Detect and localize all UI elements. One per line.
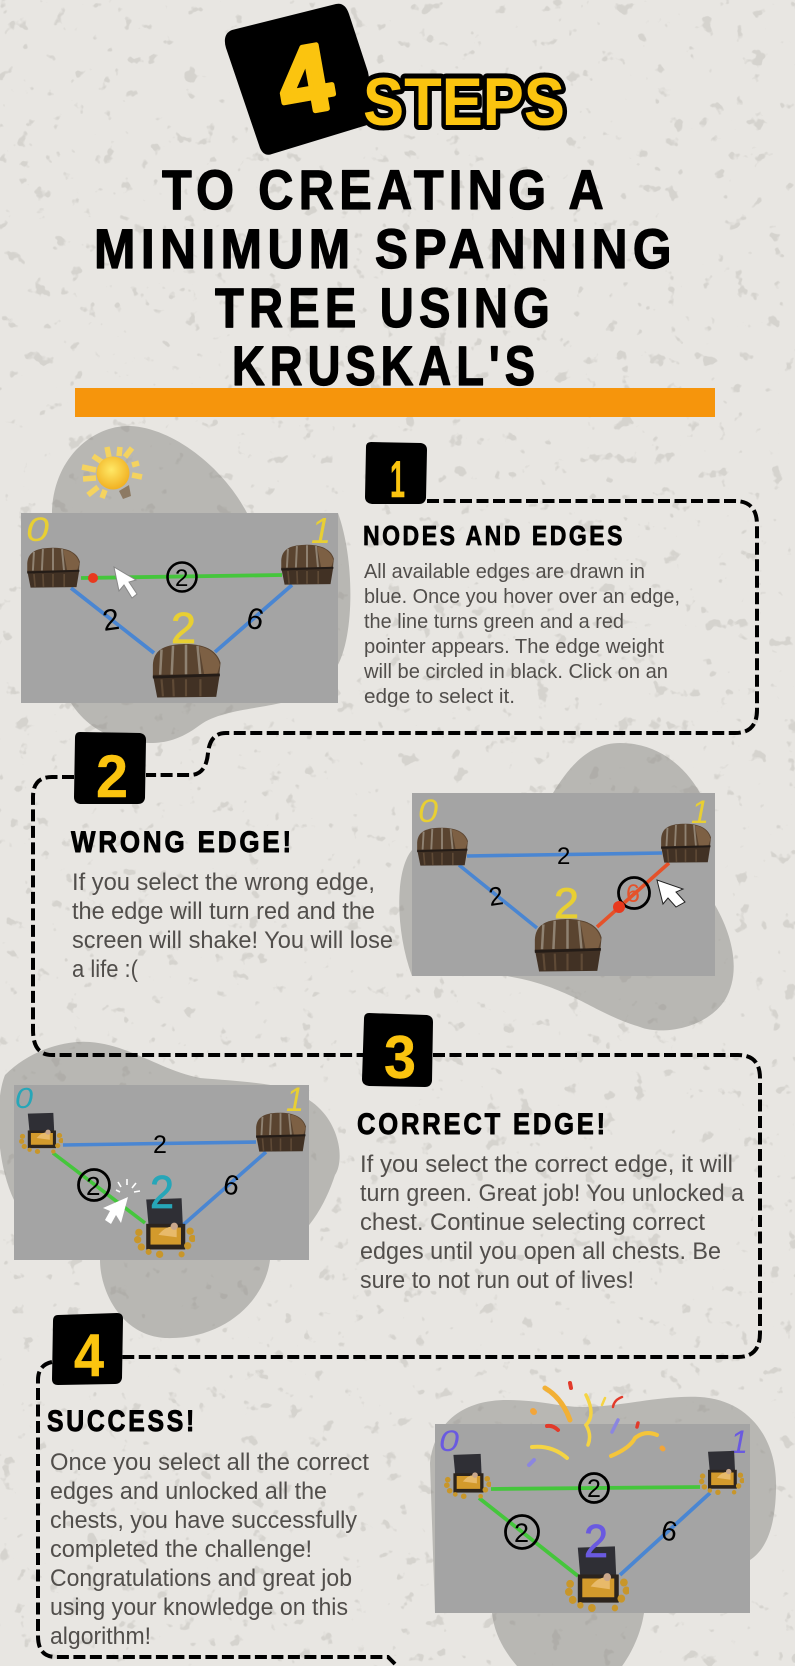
- step 2 body text: screen will shake! You will lose: [72, 927, 393, 954]
- chests: [444, 1451, 745, 1612]
- edge weights: 2: [175, 565, 188, 592]
- edge weights: 6: [221, 1168, 242, 1202]
- edge weights: [487, 843, 650, 912]
- step 3 badge: [362, 1013, 433, 1091]
- node labels: 0: [418, 793, 438, 829]
- step 2 badge: [74, 732, 146, 810]
- step 2 body text: If you select the wrong edge,: [72, 869, 375, 896]
- edge weights: 6: [244, 602, 267, 637]
- edge weights: 2: [587, 1475, 601, 1503]
- title text: MINIMUM SPANNING: [94, 217, 677, 280]
- step 4 body text: edges and unlocked all the: [50, 1478, 327, 1505]
- step 4 body text: Once you select all the correct: [50, 1449, 369, 1476]
- node labels: [418, 793, 709, 928]
- blob: step 4 background: [430, 1397, 776, 1666]
- node labels: 1: [286, 1081, 304, 1119]
- node labels: 0: [15, 1083, 33, 1115]
- edge weights: [506, 1474, 680, 1548]
- title badge: big 4 on black square: [225, 4, 377, 155]
- icon: confetti: [529, 1383, 663, 1465]
- edge weights: 2: [153, 1131, 167, 1159]
- step 3 body text: edges until you open all chests. Be: [360, 1238, 721, 1265]
- step 3 body text: [360, 1151, 745, 1294]
- node labels: 2: [554, 880, 579, 928]
- step 3 body text: turn green. Great job! You unlocked a: [360, 1180, 745, 1207]
- title badge: big 4 on black square: 4: [270, 23, 340, 136]
- dashed path connecting steps: [33, 501, 760, 1664]
- icon: light bulb: [82, 447, 142, 499]
- step 4 body text: [50, 1449, 369, 1650]
- edges: [53, 1142, 266, 1225]
- mouse cursor: [657, 880, 685, 907]
- step 2 badge: 2: [96, 743, 128, 810]
- step 1 body text: will be circled in black. Click on an: [363, 660, 668, 683]
- blob: step 3 background: [0, 1042, 340, 1338]
- step 1 body text: [363, 560, 680, 708]
- game screenshot 4: [435, 1424, 750, 1613]
- step 4 body text: Congratulations and great job: [50, 1565, 352, 1592]
- step 4 body text: chests, you have successfully: [50, 1507, 357, 1534]
- step 1 body text: pointer appears. The edge weight: [364, 635, 664, 658]
- step 4 body text: completed the challenge!: [50, 1536, 312, 1563]
- title text: KRUSKAL'S: [232, 334, 540, 397]
- step 2 body text: [72, 869, 393, 983]
- step 3 badge: 3: [384, 1024, 416, 1091]
- step 1 badge: 1: [390, 451, 405, 509]
- step 4 badge: 4: [74, 1322, 105, 1389]
- edges: [71, 575, 292, 653]
- step 2 heading: WRONG EDGE!: [71, 826, 294, 859]
- orange divider bar: [75, 388, 715, 417]
- title text: [94, 158, 677, 397]
- title text: TO CREATING A: [162, 158, 609, 221]
- click cursor: [103, 1179, 140, 1224]
- step 1 badge: [365, 442, 427, 509]
- game screenshot 1: [21, 510, 338, 703]
- edge weights: 2: [86, 1171, 100, 1201]
- edge weights: 2: [487, 880, 505, 912]
- game screenshot 3: [14, 1081, 309, 1260]
- node labels: 0: [26, 511, 49, 549]
- panel: step 2 wrong edge: [71, 732, 715, 983]
- node label 2: 2: [584, 1515, 608, 1567]
- step 1 body text: edge to select it.: [364, 685, 515, 708]
- panel: step 3 correct edge: [14, 1013, 745, 1294]
- step 4 badge: [52, 1313, 123, 1389]
- node label 2: 2: [150, 1166, 174, 1218]
- edges: [479, 1487, 710, 1576]
- node labels: [26, 510, 331, 653]
- edge weights: 2: [557, 843, 570, 870]
- edges: [459, 853, 669, 928]
- step 3 heading: CORRECT EDGE!: [357, 1108, 608, 1141]
- panel: step 1 nodes and edges: [21, 442, 680, 708]
- edge weights: [78, 1131, 242, 1202]
- step 4 body text: using your knowledge on this: [50, 1594, 348, 1621]
- edge weights: 2: [100, 603, 121, 638]
- node labels: 2: [171, 604, 196, 653]
- red pointer: [88, 573, 98, 583]
- chests: [27, 545, 334, 697]
- panel: step 4 success: [47, 1313, 750, 1650]
- step 3 body text: chest. Continue selecting correct: [360, 1209, 705, 1236]
- title: STEPS: STEPS: [363, 64, 565, 140]
- node labels: 1: [730, 1424, 748, 1460]
- step 4 body text: algorithm!: [50, 1623, 151, 1650]
- blob: step 1 background: [52, 426, 350, 743]
- step 2 body text: a life :(: [72, 956, 138, 983]
- step 1 heading: NODES AND EDGES: [363, 520, 625, 551]
- step 1 body text: the line turns green and a red: [364, 610, 624, 633]
- title text: TREE USING: [215, 276, 555, 339]
- edge weights: 2: [514, 1518, 529, 1548]
- step 1 body text: blue. Once you hover over an edge,: [364, 585, 680, 608]
- step 4 heading: SUCCESS!: [47, 1405, 197, 1438]
- edge weights: [100, 562, 267, 638]
- node labels: [15, 1081, 304, 1119]
- game screenshot 2: [412, 793, 715, 976]
- step 3 body text: sure to not run out of lives!: [360, 1267, 634, 1294]
- blob: step 2 background: [399, 743, 734, 1030]
- chests: [417, 824, 711, 971]
- red pointer: [613, 901, 625, 913]
- edge weights: 6: [659, 1514, 680, 1548]
- mouse cursor: [114, 567, 137, 598]
- node labels: [439, 1424, 748, 1460]
- edge weights: 6: [626, 880, 640, 908]
- step 3 body text: If you select the correct edge, it will: [360, 1151, 733, 1178]
- node labels: 1: [691, 794, 709, 830]
- chests: [19, 1113, 306, 1258]
- node labels: 1: [311, 510, 331, 551]
- step 1 body text: All available edges are drawn in: [364, 560, 645, 583]
- node labels: 0: [439, 1425, 459, 1458]
- step 2 body text: the edge will turn red and the: [72, 898, 375, 925]
